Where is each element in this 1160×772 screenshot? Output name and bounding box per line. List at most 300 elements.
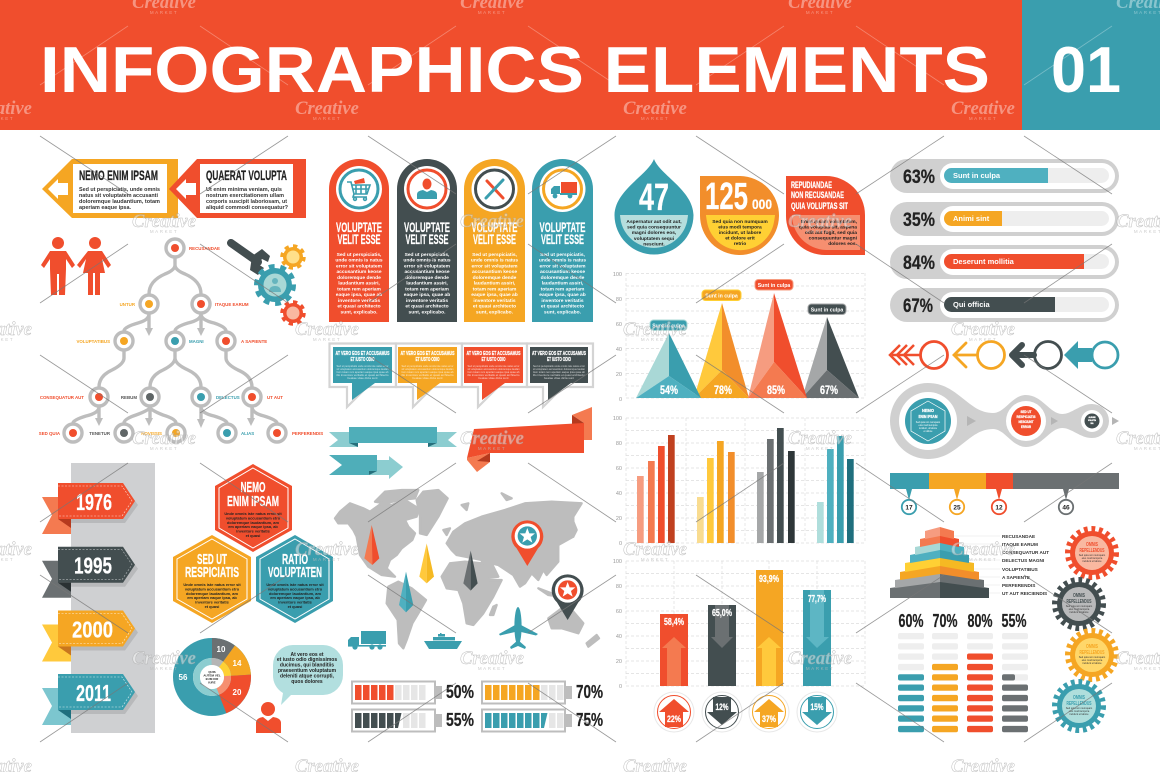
gear: teal: incidunt ut labore	[1069, 713, 1089, 716]
teal ribbon	[329, 427, 457, 447]
chart: grouped bars: 20	[616, 516, 622, 522]
chart: grouped bars: 60	[616, 466, 622, 472]
panel: dark column: Sed ut perspiciatis,	[405, 252, 450, 258]
speech bubbles row: tium totam rem aperiam eaque ipsa quae ab	[336, 370, 389, 374]
meter: 60%	[898, 633, 924, 732]
text: Creative	[951, 320, 1015, 340]
speech bubbles row: AT VERO EOS ET ACCUSAMUS	[466, 351, 521, 357]
chart: pyramids: 0	[619, 397, 622, 403]
text: MARKET	[313, 557, 341, 562]
icon: airplane	[499, 607, 538, 649]
bar: 65,0%: 65,0%	[712, 607, 732, 619]
donut chart: 14	[233, 659, 242, 668]
speech bubbles row: beatae vitae dicta sunt	[348, 376, 378, 380]
donut chart: QUIS	[208, 670, 216, 674]
text: Creative	[623, 540, 687, 560]
meter: 70%	[932, 633, 958, 732]
header banner	[0, 0, 1160, 130]
gear: red	[1068, 530, 1116, 576]
text: MARKET	[969, 116, 997, 121]
panel: teal column: error sit voluptatem	[540, 264, 586, 270]
hexagon: yellow: Unde omnis iste natus error sit	[183, 582, 241, 587]
process flow: VOLUPTA	[1088, 419, 1096, 422]
pin: red kite	[364, 525, 379, 565]
bar: 93,9%: 93,9%	[759, 573, 779, 585]
panel: teal column: VELIT ESSE	[541, 231, 584, 247]
panel: dark column: et quasi architecto	[405, 304, 449, 310]
panel: yellow column: inventore veritatis	[473, 298, 516, 304]
donut chart: AUTEM VEL	[203, 674, 221, 678]
hexagon: yellow: doloremque laudantium, am	[186, 591, 238, 596]
pin: dark star marker	[552, 574, 584, 620]
arrow: yellow	[954, 342, 1004, 368]
timeline tag: 1995	[42, 547, 138, 598]
gear: dark: incidunt ut labore	[1069, 611, 1089, 614]
layered pyramid: CONSEQUATUR AUT	[1002, 550, 1049, 555]
timeline tag: 1995: 1995	[74, 553, 112, 579]
hexagon: red: inventore veritatis	[236, 529, 270, 534]
icon: tools	[486, 180, 503, 198]
pin: teal kite	[399, 572, 413, 612]
speech bubbles row: Sed ut perspiciatis unde omnis iste natus error	[533, 364, 585, 368]
icon: shopping cart	[347, 178, 370, 200]
battery: 50%: 50%	[446, 682, 474, 702]
leaf callout: Enim ipsam voluptatem,	[801, 219, 858, 225]
hexagon: teal: VOLUPTATEN	[268, 564, 322, 581]
callout: yellow arrow tag	[42, 159, 178, 218]
tree diagram: UNTUR	[120, 302, 136, 307]
speech bubbles row: beatae vitae dicta sunt	[478, 376, 509, 380]
text: Creative	[623, 99, 687, 119]
speech bubbles row: sit voluptatem accusantium doloremque laudan	[468, 367, 520, 371]
timeline tag: 2000: 2000	[72, 616, 113, 642]
gear: dark	[1056, 580, 1102, 628]
speech bubbles row: AT VERO EOS ET ACCUSAMUS	[336, 351, 390, 357]
pin: dark kite	[463, 551, 478, 591]
drop: 47: sed quia consequuntur	[627, 224, 681, 230]
badge: 15% down: 15%	[810, 702, 824, 712]
process flow: ERROR	[1021, 425, 1031, 429]
hexagon: red: Unde omnis iste natus error sit	[224, 511, 282, 516]
panel: red column: VOLUPTATE	[336, 219, 382, 235]
pyramid: yellow 78%	[694, 303, 749, 398]
layered pyramid: UT AUT REICIENDIS	[1002, 591, 1047, 596]
panel: teal column: eaque ipsa, quae ab	[539, 292, 586, 298]
panel: dark column: VELIT ESSE	[406, 231, 448, 247]
chart: pyramids: 67%	[820, 383, 838, 397]
gear: yellow	[1068, 632, 1116, 678]
badge: 22% up: 22%	[667, 714, 681, 724]
drop: 47	[614, 159, 694, 254]
panel: teal column: Sed ut perspiciatis,	[540, 252, 586, 258]
panel: teal column: unde omnis is natus	[539, 258, 586, 264]
speech bubbles row: ET IUSTO ODIO	[482, 357, 506, 363]
text: MARKET	[806, 666, 834, 671]
speech callout with person: et iusto odio dignissimos	[277, 657, 337, 663]
chart: grouped bars: 80	[616, 441, 622, 447]
pin: yellow kite	[419, 543, 434, 583]
tree diagram: RECUSANDAE	[189, 246, 220, 251]
process flow: ENIM IPSAM	[918, 414, 938, 420]
teal arrow ribbon	[329, 455, 403, 479]
text: Creative	[295, 320, 359, 340]
speech callout with person	[256, 645, 343, 733]
leaf callout: QUIA VOLUPTAS SIT	[791, 201, 848, 211]
process flow: RESPICIATIS	[1016, 415, 1036, 419]
bar: 65,0%	[708, 605, 736, 686]
chart: arrow bars: 80	[616, 584, 622, 590]
timeline tag: 2011	[42, 674, 138, 725]
text: Creative	[460, 429, 524, 449]
icon: man and woman	[41, 237, 111, 295]
label: red tag: Sunt in culpa	[758, 283, 790, 289]
badge: 12% down: 12%	[716, 702, 728, 712]
panel: yellow column: error sit voluptatem	[472, 264, 518, 270]
timeline tag: 1976	[42, 483, 138, 534]
stacked bar with badges: 46	[1062, 504, 1070, 512]
tree diagram: A SAPIENTE	[241, 339, 267, 344]
process flow: Sed quia non numquam	[916, 422, 940, 424]
drop: 125 000: Sed quia non numquam	[712, 219, 768, 225]
drop: 125 000: incidunt, ut labore	[719, 230, 761, 236]
process flow: eius modi tempora	[919, 424, 938, 427]
speech bubbles row: tium totam rem aperiam eaque ipsa quae ab	[402, 370, 454, 374]
speech bubbles row: illo inventore veritatis et quasi architecto	[468, 373, 520, 377]
panel: red column	[329, 159, 389, 322]
panel: teal column: et quasi architecto	[541, 304, 584, 310]
callout: red arrow tag: QUAERAT VOLUPTA	[206, 167, 287, 183]
panel: yellow column: doloremque dende	[473, 275, 517, 281]
level meters: 55%	[1002, 611, 1026, 631]
pyramid: red 85%	[748, 293, 807, 398]
speech callout with person: praesentium voluptatum	[278, 668, 337, 674]
callout: yellow arrow tag: doloremque laudantium, totam	[79, 199, 160, 205]
chart: pyramids: 20	[616, 372, 622, 378]
panel: red column: eaque ipsa, quae ab	[336, 292, 382, 298]
speech bubbles row: ET IUSTO ODIO	[350, 357, 374, 363]
drop: 47: 47	[639, 177, 669, 219]
label: red tag	[755, 280, 793, 290]
panel: dark column: unde omnis is natus	[403, 258, 451, 264]
speech bubbles row: Sed ut perspiciatis unde omnis iste natus error	[402, 364, 454, 368]
timeline tag: 1976: 1976	[76, 489, 112, 515]
label: teal tag	[650, 320, 687, 330]
hexagon: yellow: inventore veritatis	[195, 600, 229, 605]
hexagon: red: voluptatum accusantium etro	[226, 515, 281, 520]
panel: teal column: laudantium assiri,	[542, 281, 584, 287]
text: Creative	[788, 212, 852, 232]
hexagon: yellow: SED UT	[197, 551, 227, 568]
chart: grouped bars	[613, 416, 865, 547]
speech bubbles row: illo inventore veritatis et quasi architecto	[336, 373, 389, 377]
panel: yellow column: eaque ipsa, quae ab	[471, 292, 518, 298]
panel: dark column: laudantium assiri,	[406, 281, 448, 287]
tree diagram: UT AUT	[267, 395, 283, 400]
hexagon: red: NEMO	[240, 479, 266, 496]
panel: yellow column: Sed ut perspiciatis,	[472, 252, 518, 258]
icon: truck	[348, 631, 386, 650]
pyramid: teal 54%	[636, 333, 701, 398]
speech bubbles row: sit voluptatem accusantium doloremque laudan	[336, 367, 389, 371]
progress pill: 63%	[890, 159, 1119, 193]
panel: dark column: doloremque dende	[405, 275, 449, 281]
gear: yellow: Sed quia non numquam	[1079, 656, 1105, 659]
gear: red: REPELLENDUS	[1080, 548, 1105, 554]
callout: yellow arrow tag: NEMO ENIM IPSAM	[79, 167, 158, 183]
text: Creative	[460, 212, 524, 232]
leaf callout: consequuntur magni	[809, 236, 858, 242]
layered pyramid: RECUSANDAE	[1002, 534, 1035, 539]
panel: dark column: sunt, explicabo.	[409, 310, 446, 316]
callout: red arrow tag: aliquid commodi consequatur?	[206, 205, 289, 211]
gear: teal: OMNIS	[1073, 695, 1085, 701]
icon: person	[417, 178, 437, 199]
text: MARKET	[478, 446, 506, 451]
donut chart	[179, 645, 242, 706]
chart: pyramids: 80	[616, 297, 622, 303]
leaf callout: dolores eos.	[828, 241, 858, 247]
label: yellow tag: Sunt in culpa	[705, 294, 738, 300]
badge: 37% up	[749, 692, 789, 732]
gear: dark: Sed quia non numquam	[1066, 605, 1092, 608]
panel: red column: inventore veritatis	[338, 298, 380, 304]
donut chart: EUM IUR	[206, 677, 219, 681]
drop: 47: Aspernatur aut odit aut,	[626, 219, 682, 225]
label: dark tag: Sunt in culpa	[811, 308, 843, 314]
battery: 70%: 70%	[576, 682, 603, 702]
drop: 47: voluptatem sequi	[634, 236, 675, 242]
layered pyramid: PERFERENDIS	[1002, 583, 1035, 588]
leaf callout: quia voluptas sit, aspena	[799, 224, 857, 230]
hexagon: red: em aperiam eaque ipsa, ab	[228, 524, 278, 529]
hexagon: red: et quasi	[246, 533, 260, 538]
chart: pyramids: 85%	[767, 383, 785, 397]
text: MARKET	[478, 666, 506, 671]
gear: yellow: REPELLENDUS	[1080, 650, 1105, 656]
icon: wrench and gears	[231, 243, 304, 324]
drop: 125 000: retrio	[734, 241, 746, 247]
chart: pyramids: 60	[616, 322, 622, 328]
tree diagram: SED QUIA	[39, 431, 61, 436]
panel: red column: laudantium assiri,	[338, 281, 380, 287]
panel: teal column: inventore veritatis	[541, 298, 584, 304]
process flow	[890, 383, 1119, 459]
world map	[335, 490, 599, 648]
level meters	[898, 611, 1028, 732]
speech bubbles row: tium totam rem aperiam eaque ipsa quae ab	[468, 370, 520, 374]
battery: 75%	[482, 710, 603, 732]
panel: red column: accusantium keose	[336, 269, 382, 275]
speech bubbles row: beatae vitae dicta sunt	[412, 376, 443, 380]
text: MARKET	[806, 446, 834, 451]
panel: red column: totam rem aperiam	[337, 286, 382, 292]
text: Creative	[132, 649, 196, 669]
hexagon: yellow: et quasi	[205, 604, 219, 609]
text: Creative	[951, 540, 1015, 560]
hexagon: yellow: RESPICIATIS	[185, 564, 239, 581]
panel: yellow column: VELIT ESSE	[473, 231, 516, 247]
timeline panel	[42, 463, 155, 733]
gear: dark: eius modi tempora	[1069, 608, 1090, 611]
tree diagram: TENETUR	[89, 431, 111, 436]
donut chart: 20	[233, 688, 242, 697]
speech callout with person: deleniti atque corrupti,	[280, 674, 335, 680]
arrow: red chevrons	[890, 342, 948, 368]
text: Creative	[788, 429, 852, 449]
tree diagram: DELECTUS	[216, 395, 240, 400]
battery: 55%	[352, 710, 474, 732]
panel: yellow column: accusantium keose	[472, 269, 517, 275]
text: Creative	[623, 320, 687, 340]
speech bubbles row: ET IUSTO ODIO	[547, 357, 571, 363]
donut chart: 10	[217, 645, 226, 654]
speech bubbles row	[330, 344, 593, 407]
panel: red column: unde omnis is natus	[335, 258, 383, 264]
panel: yellow column: sunt, explicabo.	[476, 310, 514, 316]
text: MARKET	[150, 666, 178, 671]
text: MARKET	[641, 337, 669, 342]
layered pyramid: A SAPIENTE	[1002, 575, 1030, 580]
speech bubbles row: AT VERO EOS ET ACCUSAMUS	[532, 351, 586, 357]
text: Creative	[132, 212, 196, 232]
bar: 93,9%	[756, 570, 783, 686]
speech bubbles row: Sed ut perspiciatis unde omnis iste natus error	[336, 364, 389, 368]
hexagon: teal: em aperiam eaque ipsa, ab	[270, 595, 320, 600]
pyramid: dark 67%	[802, 317, 859, 398]
panel: teal column: totam rem aperiam	[541, 286, 585, 292]
hexagon: teal: inventore veritatis	[278, 600, 312, 605]
stacked bar with badges: 12	[995, 504, 1003, 512]
text: Creative	[295, 99, 359, 119]
callout: red arrow tag: nostrum exercitationem ullam	[206, 193, 284, 199]
bar: 58,4%: 58,4%	[664, 616, 684, 628]
progress pill: 35%: Animi sint	[953, 214, 990, 223]
text: MARKET	[641, 557, 669, 562]
tree diagram	[39, 239, 323, 442]
badge: 15% down	[797, 692, 837, 732]
process flow: NESCIUNT	[1018, 420, 1034, 424]
chart: pyramids: 54%	[660, 383, 678, 397]
callout: red arrow tag: Ut enim minima veniam, quis	[206, 187, 282, 193]
tree diagram: ALIAS	[241, 431, 254, 436]
speech bubbles row: ET IUSTO ODIO	[416, 357, 440, 363]
drop: 125 000: 125	[705, 176, 748, 218]
progress pill: 67%	[890, 288, 1119, 322]
hexagon: teal: et quasi	[288, 604, 302, 609]
panel: dark column: inventore veritatis	[406, 298, 448, 304]
hexagon: red: doloremque laudantium, am	[227, 520, 279, 525]
progress pill: 84%	[890, 245, 1119, 279]
text: Creative	[788, 649, 852, 669]
text: MARKET	[313, 337, 341, 342]
label: dark tag	[808, 304, 846, 314]
issue number: 01	[1051, 33, 1121, 106]
gear: red: OMNIS	[1086, 542, 1098, 548]
icon: person	[256, 702, 281, 733]
speech bubbles row: illo inventore veritatis et quasi architecto	[533, 373, 585, 377]
progress pill: 84%: Deserunt mollitia	[953, 257, 1015, 266]
panel: teal column: accusantium keose	[540, 269, 585, 275]
panel: teal column	[532, 159, 593, 322]
text: Creative	[951, 99, 1015, 119]
drop: 125 000: et dolore erit	[725, 236, 755, 242]
text: MARKET	[641, 116, 669, 121]
leaf callout: NON RECUSANDAE	[791, 190, 844, 200]
battery: 70%	[482, 682, 603, 704]
text: MARKET	[806, 229, 834, 234]
tree diagram: VOLUPTATIBUS	[76, 339, 110, 344]
gear: red: incidunt ut labore	[1082, 560, 1102, 563]
icon: delivery truck	[551, 182, 577, 198]
label: teal tag: Sunt in culpa	[652, 324, 685, 330]
chart: arrow bars: 0	[619, 684, 622, 690]
speech bubbles row: tium totam rem aperiam eaque ipsa quae ab	[533, 370, 585, 374]
panel: teal column: VOLUPTATE	[540, 219, 586, 235]
chart: pyramids	[613, 272, 865, 403]
hexagon: teal	[256, 535, 333, 623]
tree diagram: CONSEQUATUR AUT	[40, 395, 84, 400]
tree diagram: PERFERENDIS	[292, 431, 323, 436]
timeline tag: 2000	[42, 610, 138, 662]
speech bubbles row: Sed ut perspiciatis unde omnis iste natus error	[468, 364, 520, 368]
callout: yellow arrow tag: aperiam eaque ipsa.	[79, 205, 131, 211]
hexagon: yellow	[173, 535, 251, 623]
callout: red arrow tag	[169, 159, 306, 218]
speech callout with person: ducimus, qui blanditiis	[280, 662, 334, 668]
arrow: teal	[1064, 341, 1118, 369]
hexagon: teal: Unde omnis iste natus error sit	[266, 582, 324, 587]
process flow: incidunt, ut labore	[919, 427, 938, 430]
panel: teal column: doloremque dende	[541, 275, 585, 281]
hexagon: teal: RATIO	[282, 551, 308, 568]
chart: grouped bars: 100	[613, 416, 622, 422]
red ribbon	[467, 407, 592, 472]
panel: yellow column: laudantium assiri,	[474, 281, 516, 287]
text: MARKET	[969, 557, 997, 562]
text: MARKET	[478, 10, 506, 15]
panel: yellow column	[464, 159, 525, 322]
battery: 75%: 75%	[576, 710, 603, 730]
gear: teal: REPELLENDUS	[1066, 701, 1092, 707]
tree diagram: ITAQUE EARUM	[215, 302, 249, 307]
drop: 125 000: 000	[752, 196, 772, 212]
meter: 55%	[1002, 633, 1028, 732]
gear: teal: Sed quia non numquam	[1066, 707, 1092, 710]
layered pyramid: VOLUPTATIBUS	[1002, 567, 1038, 572]
bar: 77,7%	[803, 590, 831, 686]
badge: 12% down	[702, 692, 742, 732]
panel: yellow column: et quasi architecto	[473, 304, 516, 310]
gear: dark: REPELLENDUS	[1066, 599, 1092, 605]
gear: yellow: OMNIS	[1086, 644, 1098, 650]
panel: red column: Sed ut perspiciatis,	[337, 252, 382, 258]
progress pill: 67%: Qui officia	[953, 300, 990, 309]
gear: dark: OMNIS	[1073, 593, 1085, 599]
title: INFOGRAPHICS ELEMENTS	[40, 33, 990, 106]
leaf callout: odit aut fugit, sed quia	[805, 230, 857, 236]
process flow: et dolore	[924, 430, 933, 433]
panel: red column: doloremque dende	[337, 275, 381, 281]
donut chart: IURE	[208, 680, 216, 684]
text: MARKET	[478, 229, 506, 234]
panel: dark column: error sit voluptatem	[404, 264, 451, 270]
panel: red column: VELIT ESSE	[338, 231, 380, 247]
panel: red column: et quasi architecto	[337, 304, 381, 310]
donut chart: 56	[179, 673, 188, 682]
chart: arrow bars: 40	[616, 634, 622, 640]
progress pill: 35%: 35%	[903, 210, 935, 231]
bar: 58,4%	[660, 614, 688, 686]
